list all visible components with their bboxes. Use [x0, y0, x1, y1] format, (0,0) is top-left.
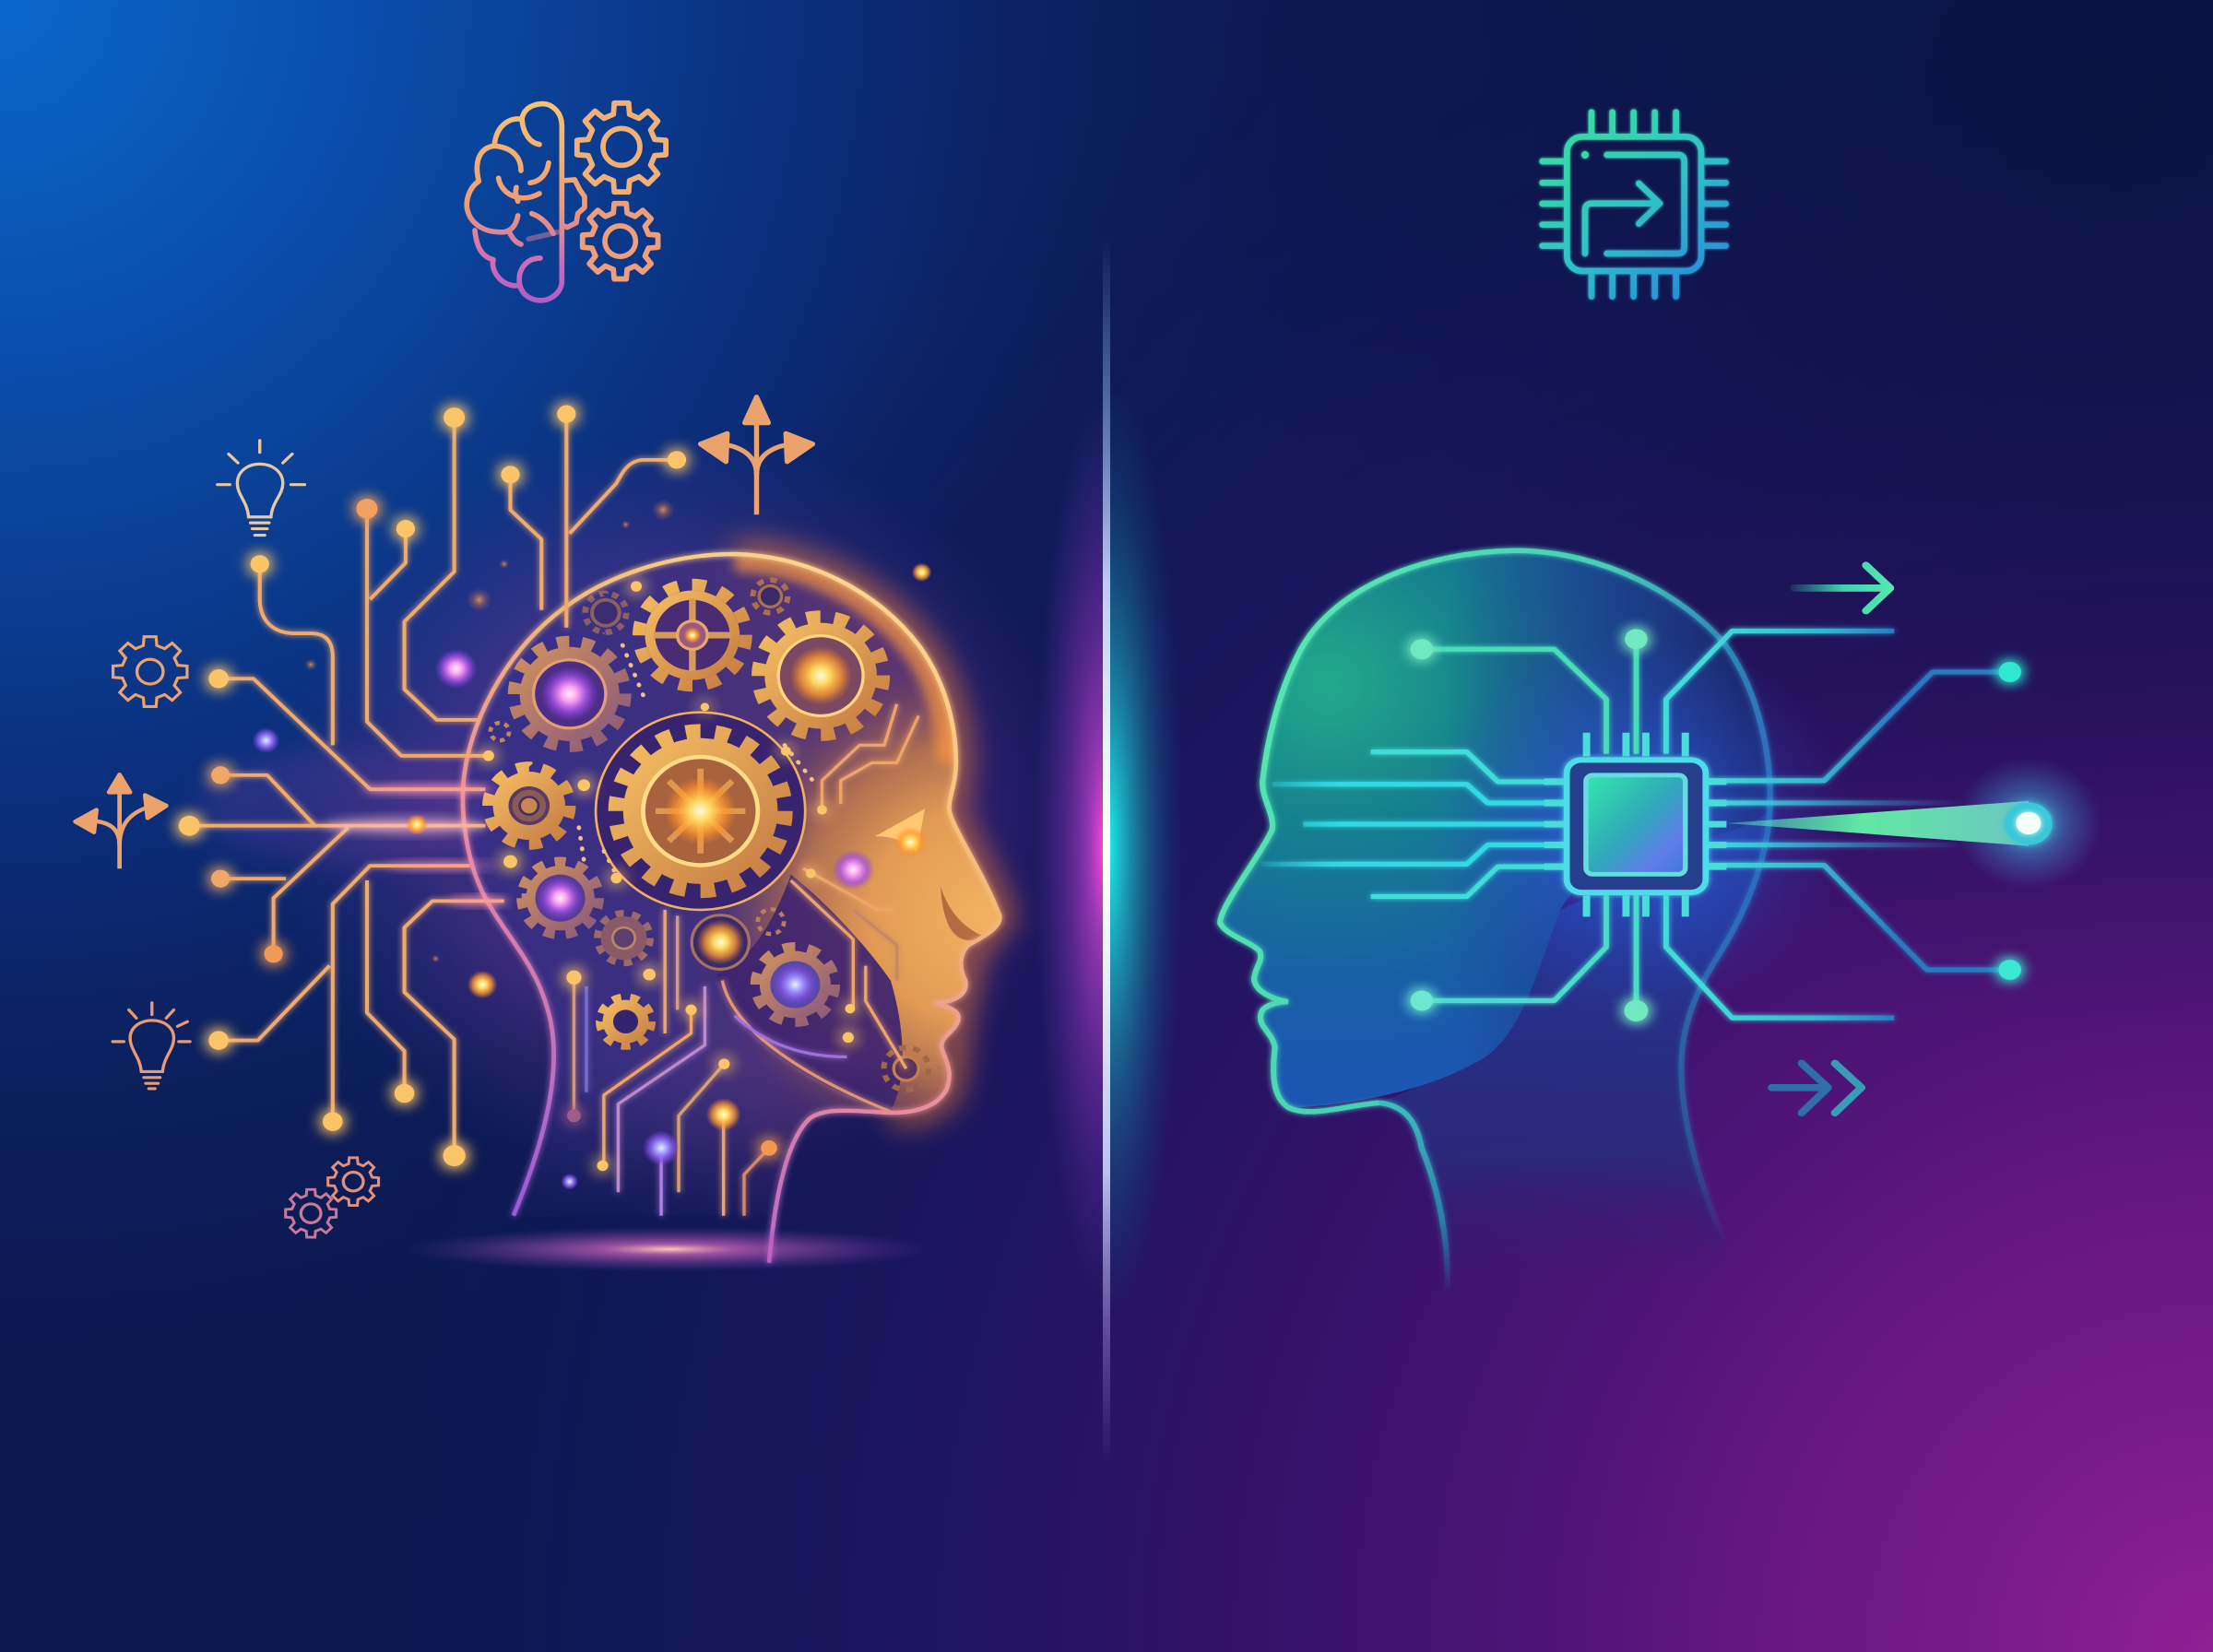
arrow top right [1794, 565, 1890, 611]
head outline [463, 554, 1000, 1263]
icon: twin gears bottom [286, 1158, 379, 1237]
gear: left middle [488, 767, 570, 844]
dotted connectors [579, 645, 812, 880]
head and neck fill [1223, 553, 1767, 1245]
incoming circuit traces [1260, 639, 1636, 1010]
head glow [198, 433, 1078, 1186]
glowing terminal nodes [179, 406, 855, 1171]
central divider [1024, 240, 1197, 1466]
floor glow [408, 1227, 931, 1271]
inner circuit traces [574, 704, 918, 1216]
gear: large central [596, 713, 805, 910]
panel: human thinking head [76, 397, 1078, 1271]
head outline [1220, 550, 1770, 1295]
outgoing circuit traces [1666, 631, 2010, 1018]
gear: small orange [599, 997, 652, 1046]
icon: lightbulb bottom [112, 1003, 190, 1089]
bright junction glows [324, 784, 510, 905]
icon: gear left [113, 637, 187, 706]
double chevron arrow [1771, 1063, 1862, 1113]
icon: brain and gears [467, 103, 666, 301]
gear: lower left purple [522, 862, 598, 935]
icon: processor with arrow [1543, 112, 1726, 297]
chip glow [1422, 632, 1851, 1017]
glowing orb [692, 915, 749, 969]
chip pins [1544, 733, 1726, 916]
head silhouette [463, 554, 1028, 1216]
small gears inside head [491, 580, 929, 1090]
gear: upper right glowing [759, 617, 883, 735]
gear: upper left purple hub [515, 643, 624, 746]
icon: fork arrows left [76, 774, 166, 868]
panel: machine processing head [1199, 516, 2102, 1295]
outer circuit traces [189, 414, 677, 1156]
gear: top spoked [639, 584, 746, 686]
light beam [1726, 758, 2102, 889]
circuit end nodes [1411, 629, 2021, 1021]
gear: lower right blue hub [755, 947, 835, 1022]
icon: fork arrows top [701, 397, 812, 514]
icon: lightbulb top [218, 441, 304, 536]
gear: small dim [598, 914, 650, 962]
floating particles [253, 500, 931, 1190]
microchip [1567, 760, 1706, 892]
